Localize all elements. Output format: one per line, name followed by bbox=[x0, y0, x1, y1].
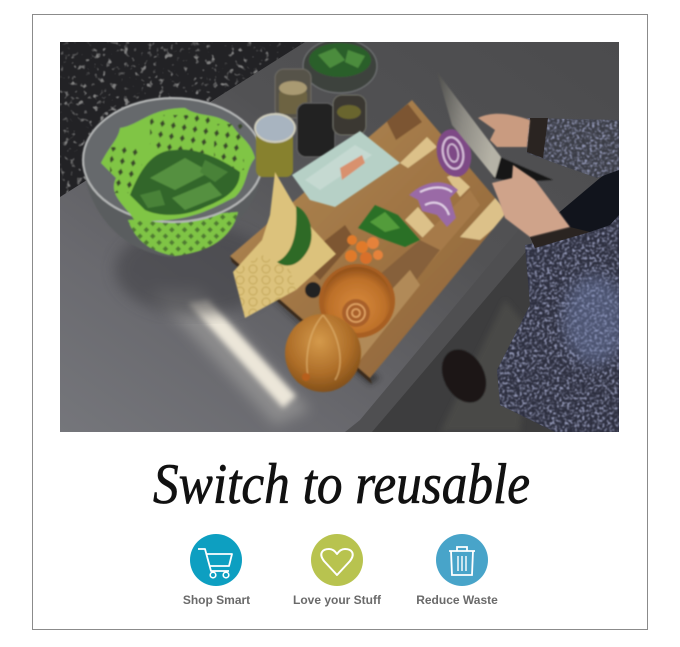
title: Switch to reusable bbox=[153, 453, 530, 516]
beeswax wrap with pepper bbox=[233, 172, 336, 318]
silicone bag with carrots bbox=[292, 131, 400, 207]
photo: kitchen counter with reusable items bbox=[60, 39, 627, 432]
yellow onion bbox=[285, 314, 361, 392]
hands bbox=[478, 114, 570, 237]
label: love your stuff: Love your Stuff bbox=[293, 593, 382, 607]
icon: shopping cart bbox=[190, 534, 242, 586]
cutting board bbox=[230, 100, 507, 384]
icon: trash can bbox=[436, 534, 488, 586]
red onion half and slices bbox=[409, 126, 476, 227]
board shadow bbox=[274, 302, 380, 386]
chopped pepper and carrots bbox=[345, 205, 420, 264]
copper colander bowl bbox=[319, 264, 395, 338]
lidded mustard jar bbox=[256, 130, 293, 177]
small seed jar bbox=[333, 95, 366, 135]
countertop bbox=[60, 42, 619, 432]
hole in board bbox=[305, 282, 321, 298]
jars and glass bowl bbox=[255, 39, 377, 177]
icon: heart bbox=[311, 534, 363, 586]
counter edge and floor bbox=[345, 252, 554, 432]
seed jar bbox=[275, 69, 311, 118]
salad spinner bbox=[83, 98, 263, 257]
knife bbox=[437, 72, 553, 182]
granite backsplash bbox=[60, 42, 305, 197]
shoe bbox=[441, 349, 487, 404]
dark jar bbox=[297, 103, 335, 157]
spinner shadow bbox=[112, 230, 250, 324]
light glare on counter bbox=[150, 290, 310, 425]
label: shop smart: Shop Smart bbox=[183, 593, 250, 607]
spinach leaves bbox=[130, 150, 240, 215]
glass bowl with greens bbox=[303, 39, 377, 93]
label: reduce waste: Reduce Waste bbox=[416, 593, 498, 607]
person: sweater and dark top bbox=[497, 118, 627, 432]
